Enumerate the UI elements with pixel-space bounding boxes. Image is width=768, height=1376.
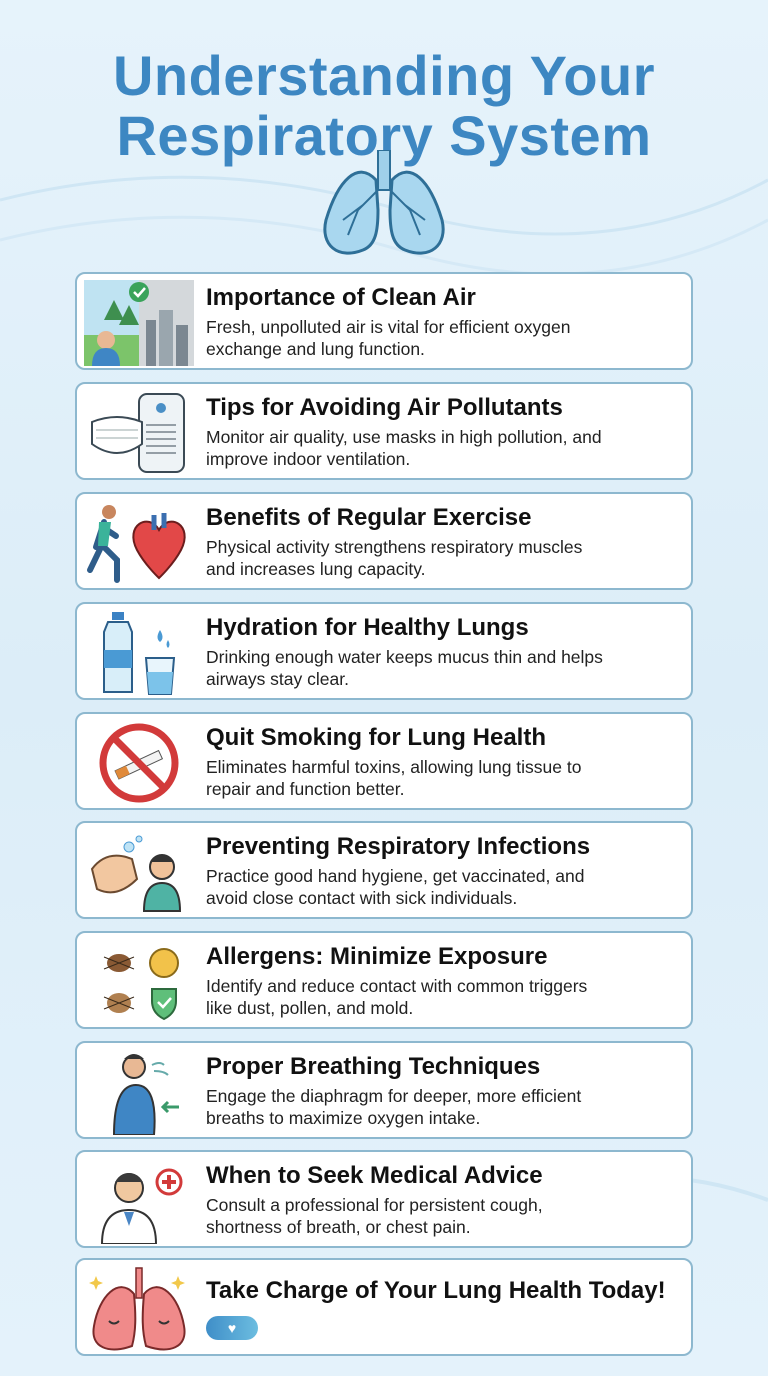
title [113,44,655,167]
title: Respiratory System [116,104,652,167]
card: infections [75,821,693,919]
card: medical advice [75,1150,693,1248]
icon: doctor [101,1168,182,1244]
title: Understanding Your [113,44,655,107]
badge: lungs pill [206,1316,258,1340]
card: call to action [75,1258,693,1356]
heading: When to Seek Medical Advice [206,1162,543,1189]
icon: water bottle and glass [103,612,176,695]
text: Physical activity strengthens respiratory muscles and increases lung capacity. [206,537,582,579]
text: Fresh, unpolluted air is vital for efficient oxygen exchange and lung function. [206,317,570,359]
icon: happy lungs [89,1267,186,1350]
card: allergens [75,931,693,1029]
heading: Preventing Respiratory Infections [206,833,590,860]
card: pollutants [75,382,693,480]
heading: Allergens: Minimize Exposure [206,943,547,970]
heading: Quit Smoking for Lung Health [206,724,546,751]
text: Practice good hand hygiene, get vaccinated, and avoid close contact with sick individuals. [206,866,584,908]
heading: Tips for Avoiding Air Pollutants [206,394,563,421]
text: Drinking enough water keeps mucus thin and helps airways stay clear. [206,647,603,689]
icon: handwashing and person [90,836,181,912]
card: clean air [75,272,693,370]
icon: runner and heart [87,505,186,583]
heading: Importance of Clean Air [206,284,476,311]
heading: Take Charge of Your Lung Health Today! [206,1277,666,1304]
icon: no smoking [100,724,178,802]
text: Monitor air quality, use masks in high pollution, and improve indoor ventilation. [206,427,602,469]
text: Identify and reduce contact with common triggers like dust, pollen, and mold. [206,976,587,1018]
icon: clean air scene [84,280,194,366]
icon: mask and purifier [91,393,185,473]
heading: Proper Breathing Techniques [206,1053,540,1080]
card: quit smoking [75,712,693,810]
text: Engage the diaphragm for deeper, more efficient breaths to maximize oxygen intake. [206,1086,581,1128]
icon: lungs header [323,150,445,255]
card: hydration [75,602,693,700]
icon: person breathing [113,1054,179,1135]
card: exercise [75,492,693,590]
card: breathing [75,1041,693,1139]
heading: Hydration for Healthy Lungs [206,614,529,641]
icon: mites, pollen, shield [104,948,179,1020]
badge: lungs pill: ♥ [228,1320,236,1336]
heading: Benefits of Regular Exercise [206,504,531,531]
text: Consult a professional for persistent cough, shortness of breath, or chest pain. [206,1195,543,1237]
text: Eliminates harmful toxins, allowing lung tissue to repair and function better. [206,757,581,799]
